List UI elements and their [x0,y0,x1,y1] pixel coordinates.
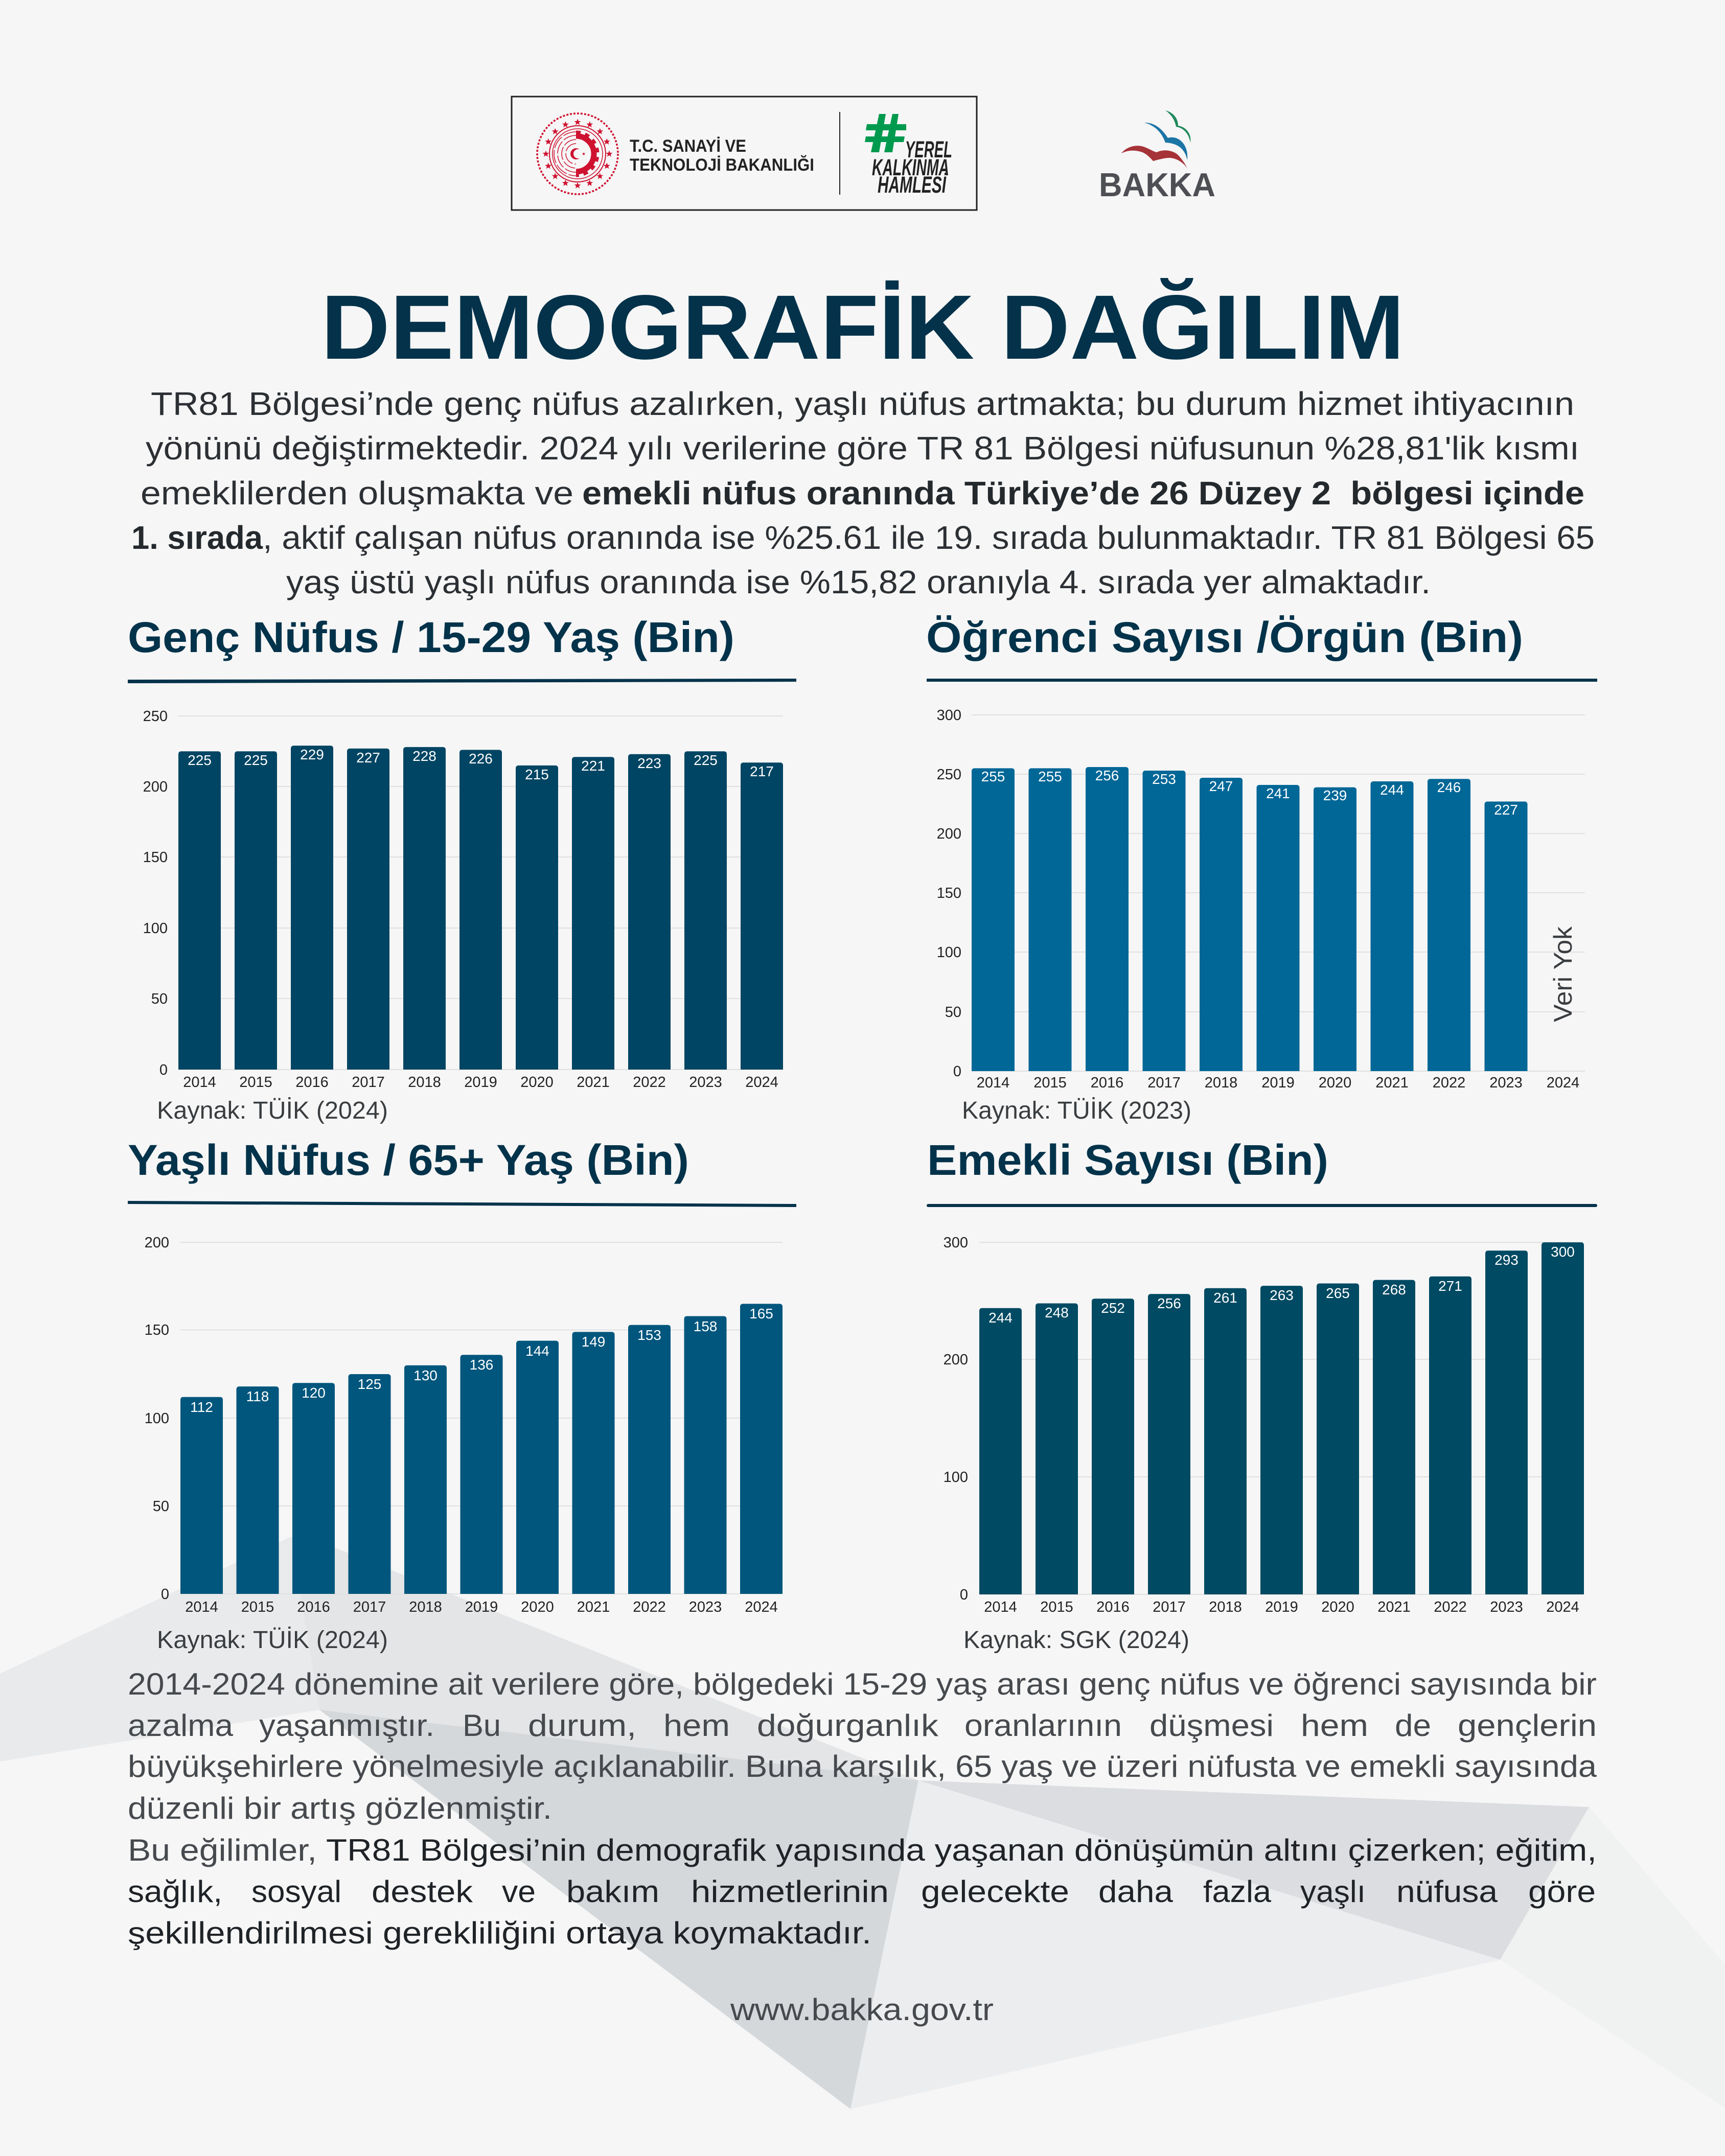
x axis labels: 2017 [352,1074,385,1091]
source: Kaynak: TÜİK (2024) [157,1627,388,1654]
y axis labels: 0 [161,1586,169,1603]
value labels [981,768,1518,818]
bars [972,767,1527,1075]
body text block: hem [1301,1708,1368,1743]
x axis labels: 2016 [295,1074,329,1091]
value labels: 239 [1323,787,1347,803]
y axis labels: 150 [145,1322,169,1338]
intro text block: 1. sırada [131,519,263,556]
body text block: TR81 Bölgesi’nin demografik yapısında yaşanan dönüşümün altını çizerken; eğitim, [326,1833,1597,1867]
x axis labels: 2019 [1265,1599,1298,1615]
x axis labels: 2018 [1209,1599,1242,1615]
value labels: 225 [694,752,718,768]
value labels: 293 [1494,1252,1519,1268]
background: low-poly shapes [0,1537,1725,2109]
heading: Öğrenci Sayısı: Öğrenci Sayısı /Örgün (Bin) [926,613,1523,661]
y axis labels [944,1235,968,1603]
body text block: gençlerin [1458,1708,1597,1743]
body text block: sosyal [251,1874,341,1909]
y axis labels: 100 [937,944,961,961]
x axis labels: 2017 [1153,1599,1186,1615]
value labels: 153 [637,1327,661,1343]
heading: Emekli Sayısı: Emekli Sayısı (Bin) [927,1136,1328,1184]
x axis labels: 2014 [977,1075,1009,1091]
x axis labels: 2021 [1375,1075,1409,1091]
x axis labels: 2019 [464,1074,497,1091]
x axis labels: 2018 [408,1074,441,1091]
value labels: 227 [1494,802,1518,818]
y axis labels: 200 [145,1235,169,1251]
value labels: 256 [1095,768,1119,783]
body text block: büyükşehirlere yönelmesiyle açıklanabilir. Buna karşılık, 65 yaş ve üzeri nüfusta ve emekli sayısında [128,1749,1597,1783]
value labels [188,747,774,782]
ministry name [630,136,814,175]
ministry name: TEKNOLOJİ BAKANLIĞI [630,155,814,175]
y axis labels: 150 [937,885,961,901]
x axis labels: 2015 [239,1074,272,1091]
panel: Genç Nüfus chart [128,613,796,1124]
body text block: doğurganlık [757,1708,939,1743]
x axis labels: 2017 [353,1599,386,1615]
y axis labels: 250 [937,767,961,783]
x axis labels [977,1075,1579,1091]
Yerel Kalkınma Hamlesi wordmark: KALKINMA [872,154,949,180]
value labels: 241 [1266,785,1290,801]
x axis labels: 2014 [984,1599,1017,1615]
y axis labels: 250 [143,708,168,725]
value labels: 256 [1157,1295,1181,1311]
x axis labels: 2023 [689,1074,722,1091]
value labels: 165 [749,1306,773,1322]
body text block: göre [1528,1874,1596,1909]
body text block: destek [372,1874,473,1909]
Yerel Kalkınma Hamlesi wordmark [872,136,952,198]
body text block: yaşlı [1300,1874,1366,1909]
BAKKA logo [1099,110,1215,203]
x axis labels: 2018 [409,1599,442,1615]
x axis labels: 2018 [1205,1075,1237,1091]
x axis labels: 2022 [1433,1075,1465,1091]
value labels: 227 [356,750,380,766]
value labels: 229 [300,747,324,762]
value labels: 226 [469,751,493,767]
source: Kaynak: TÜİK (2023) [962,1097,1191,1124]
body text block: azalma [128,1708,234,1743]
x axis labels: 2020 [1321,1599,1354,1615]
x axis labels: 2022 [633,1599,666,1615]
ministry name: T.C. SANAYİ VE [630,136,746,156]
value labels: 149 [582,1334,605,1350]
x axis labels: 2019 [1261,1075,1295,1091]
panel: Öğrenci Sayısı chart [926,613,1597,1124]
y axis labels: 300 [944,1235,968,1251]
website url: www.bakka.gov.tr [730,1992,994,2027]
body text block: oranlarının [964,1708,1122,1743]
x axis labels: 2023 [1489,1075,1523,1091]
x axis labels: 2015 [1040,1599,1073,1615]
x axis labels: 2024 [745,1074,778,1091]
body text block: 2014-2024 dönemine ait verilere göre, bölgedeki 15-29 yaş arası genç nüfus ve öğrenci sayısında bir [128,1667,1597,1701]
value labels [190,1306,773,1415]
intro text block: TR81 Bölgesi’nde genç nüfus azalırken, yaşlı nüfus artmakta; bu durum hizmet ihtiyacının [151,385,1574,422]
source: Kaynak: TÜİK (2024) [157,1097,388,1124]
value labels: 118 [246,1388,269,1404]
body text block: ve [502,1874,536,1909]
value labels: 130 [413,1367,438,1383]
value labels: 221 [581,758,605,774]
body text block: daha [1098,1874,1174,1909]
body text block: Bu [463,1708,501,1743]
x axis labels: 2014 [185,1599,218,1615]
value labels: 228 [412,748,436,764]
body text block: yaşanmıştır. [259,1708,434,1743]
y axis labels: 0 [159,1062,168,1078]
intro text block: emekli nüfus oranında Türkiye’de 26 Düzey 2 bölgesi içinde [582,475,1584,512]
y axis labels: 50 [151,991,168,1007]
value labels: 268 [1382,1282,1406,1297]
body text block: bakım [566,1874,659,1909]
value labels: 112 [190,1399,213,1415]
value labels: 253 [1152,771,1176,787]
bars [979,1242,1584,1597]
x axis labels: 2019 [465,1599,498,1615]
value labels: 225 [244,752,268,768]
x axis labels: 2023 [689,1599,722,1615]
x axis labels: 2020 [1319,1075,1351,1091]
value labels: 136 [470,1357,493,1373]
body text block: sağlık, [128,1874,222,1909]
y axis labels: 300 [937,707,961,724]
x axis labels: 2023 [1490,1599,1523,1615]
logo box: ministry and Yerel Kalkınma Hamlesi [512,97,977,210]
intro text block: , aktif çalışan nüfus oranında ise %25.61 ile 19. sırada bulunmaktadır. TR 81 Bölgesi 65 [263,519,1595,556]
x axis labels: 2014 [183,1074,216,1091]
Yerel Kalkınma Hamlesi wordmark: HAMLESİ [878,172,947,198]
body text block: Bu eğilimler, [128,1833,317,1867]
x axis labels: 2024 [1546,1599,1579,1615]
value labels: 247 [1209,778,1233,794]
icon: ministry emblem [537,113,618,194]
y axis labels: 200 [944,1352,968,1368]
x axis labels [984,1599,1579,1615]
x axis labels: 2016 [297,1599,330,1615]
y axis labels: 100 [145,1410,169,1427]
x axis labels: 2022 [1434,1599,1467,1615]
value labels: 255 [1038,769,1062,784]
intro text block [131,385,1595,600]
x axis labels: 2020 [521,1599,554,1615]
body text block: gelecekte [921,1874,1069,1909]
value labels: 265 [1326,1285,1350,1301]
body text block [128,1667,1597,1950]
body text block: düşmesi [1149,1708,1274,1743]
heading: Genç Nüfus: Genç Nüfus / 15-29 Yaş (Bin) [128,613,734,661]
x axis labels: 2024 [745,1599,778,1615]
panel: Yaşlı Nüfus chart [128,1136,796,1654]
BAKKA logo: BAKKA [1099,166,1215,203]
x axis labels [185,1599,778,1615]
y axis labels [937,707,961,1080]
value labels: 125 [358,1376,381,1392]
value labels: 248 [1045,1305,1069,1320]
x axis labels: 2016 [1091,1075,1123,1091]
value labels: 144 [525,1343,549,1359]
x axis labels: 2015 [1033,1075,1067,1091]
value labels: 223 [637,755,661,771]
body text block: fazla [1203,1874,1272,1909]
x axis labels: 2021 [1377,1599,1411,1615]
y axis labels: 150 [143,849,168,866]
y axis labels [145,1235,169,1603]
panel: Emekli Sayısı chart [927,1136,1597,1654]
value labels: 158 [694,1318,717,1334]
intro text block: yönünü değiştirmektedir. 2024 yılı verilerine göre TR 81 Bölgesi nüfusunun %28,81'lik kısmı [146,430,1579,467]
y axis labels [143,708,168,1078]
x axis labels: 2021 [577,1074,610,1091]
source: Kaynak: SGK (2024) [963,1627,1189,1654]
bars [178,746,783,1074]
value labels: 120 [302,1385,326,1401]
value labels: 300 [1551,1244,1575,1260]
value labels: 246 [1437,779,1461,795]
icon: green hash [865,114,906,152]
x axis labels: 2015 [241,1599,274,1615]
value labels: 261 [1213,1290,1237,1306]
intro text block: emeklilerden oluşmakta ve [141,475,573,512]
body text block: hizmetlerinin [691,1874,889,1909]
Yerel Kalkınma Hamlesi wordmark: YEREL [905,136,952,163]
y axis labels: 50 [945,1004,961,1021]
value labels: 244 [1380,782,1404,798]
y axis labels: 200 [143,779,168,795]
x axis labels [183,1074,778,1091]
value labels: 225 [188,752,212,768]
x axis labels: 2022 [633,1074,666,1091]
annotation: Veri Yok: Veri Yok [1549,926,1577,1022]
value labels [988,1244,1575,1326]
body text block: nüfusa [1396,1874,1498,1909]
body text block: şekillendirilmesi gerekliliğini ortaya koymaktadır. [128,1916,871,1950]
value labels: 255 [981,769,1005,784]
heading: Yaşlı Nüfus: Yaşlı Nüfus / 65+ Yaş (Bin) [128,1136,689,1184]
y axis labels: 200 [937,826,961,842]
value labels: 217 [750,763,774,779]
value labels: 244 [988,1310,1013,1326]
y axis labels: 50 [153,1498,169,1515]
body text block: durum, [528,1708,636,1743]
body text block: düzenli bir artış gözlenmiştir. [128,1791,552,1825]
x axis labels: 2017 [1147,1075,1181,1091]
value labels: 271 [1438,1278,1462,1294]
x axis labels: 2024 [1547,1075,1579,1091]
y axis labels: 100 [944,1469,968,1486]
x axis labels: 2020 [520,1074,554,1091]
y axis labels: 0 [953,1063,961,1080]
body text block: de [1395,1708,1431,1743]
bars [180,1304,783,1597]
value labels: 252 [1101,1300,1125,1316]
x axis labels: 2016 [1096,1599,1130,1615]
y axis labels: 0 [960,1587,968,1603]
body text block: hem [663,1708,730,1743]
value labels: 215 [525,767,549,782]
value labels: 263 [1270,1287,1294,1303]
x axis labels: 2021 [577,1599,610,1615]
y axis labels: 100 [143,920,168,937]
title: DEMOGRAFİK DAĞILIM [321,276,1405,378]
intro text block: yaş üstü yaşlı nüfus oranında ise %15,82 oranıyla 4. sırada yer almaktadır. [286,564,1431,600]
